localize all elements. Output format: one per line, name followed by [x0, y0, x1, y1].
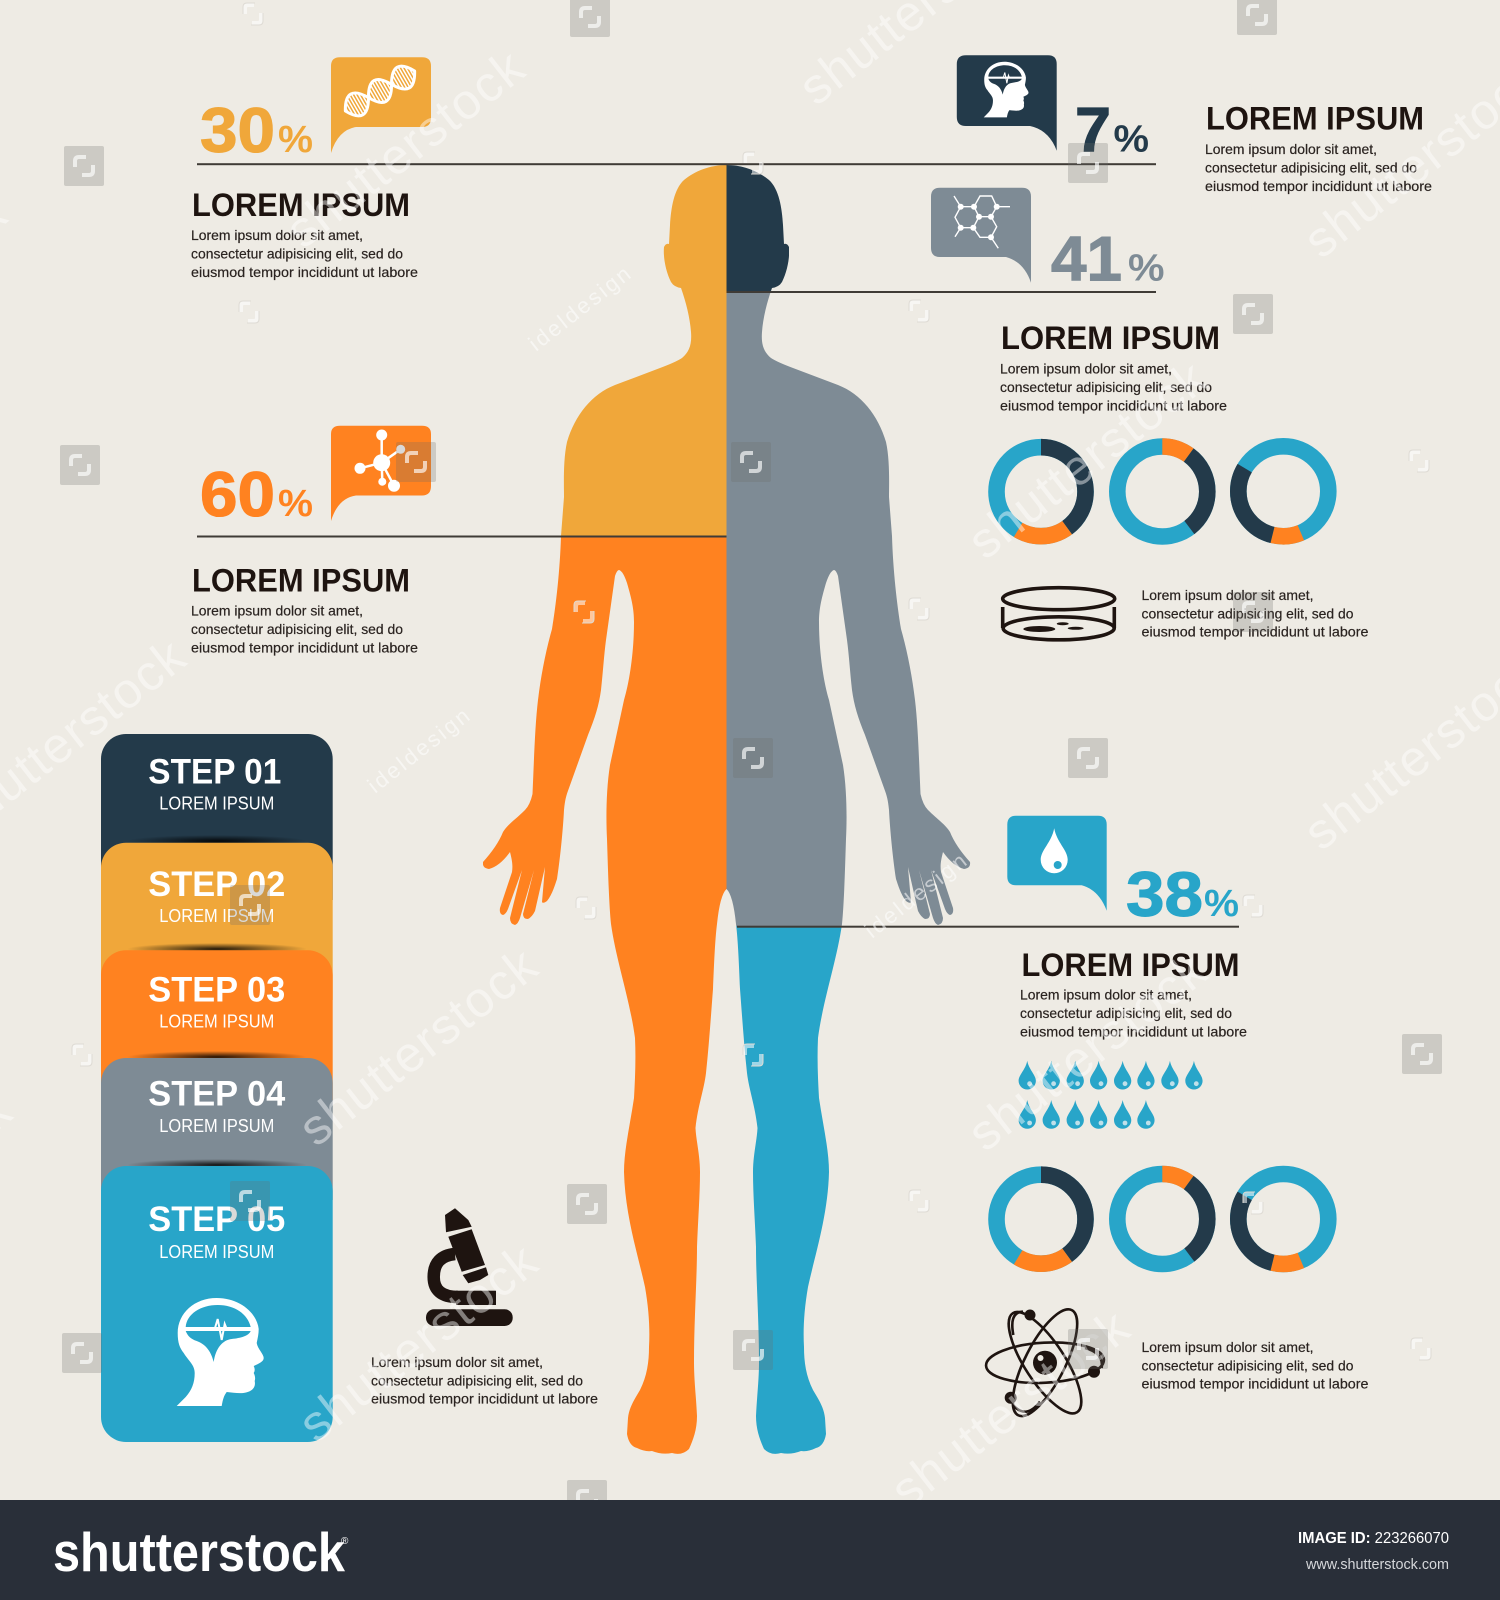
text block: petri dish caption — [1142, 587, 1369, 640]
body part: upper left torso and head (amber) — [561, 165, 726, 536]
text block: upper right: consectetur adipisicing elit, sed do — [1000, 379, 1212, 395]
panel: 41% callout — [931, 188, 1164, 295]
footer registered mark: ® — [341, 1536, 349, 1547]
stock watermark overlay: shutterstock — [288, 1232, 548, 1453]
stat: 30% — [200, 96, 313, 166]
text block: top left: eiusmod tempor incididunt ut labore — [191, 264, 418, 280]
text block: middle left: Lorem ipsum dolor sit amet, — [191, 602, 363, 618]
icon: microscope — [426, 1208, 513, 1326]
text block: lower right — [1020, 947, 1247, 1040]
leader lines — [197, 163, 1239, 928]
stat: 41%: 41 — [1051, 225, 1122, 295]
donut 2 — [1117, 1174, 1207, 1264]
stat: 7%: 7 — [1075, 96, 1111, 166]
stock watermark overlay: shutterstock — [288, 936, 548, 1157]
stock watermark overlay: shutterstock — [275, 38, 535, 259]
stat: 7% — [1075, 96, 1149, 166]
text block: petri dish caption: eiusmod tempor incididunt ut labore — [1142, 624, 1369, 640]
stat: 41%: % — [1128, 248, 1164, 290]
donut 1 — [996, 447, 1086, 536]
icon: head with brain pulse — [177, 1298, 264, 1406]
step 01 card: STEP 01 — [148, 753, 281, 792]
stat: 60%: 60 — [200, 460, 275, 530]
text block: top left: LOREM IPSUM — [192, 187, 410, 223]
donut 3 — [1238, 1174, 1328, 1264]
body part: right torso and arm (gray) — [726, 292, 970, 926]
stat: 30%: 30 — [200, 96, 275, 166]
text block: top left: Lorem ipsum dolor sit amet, — [191, 227, 363, 243]
step 02 card — [101, 843, 333, 1000]
donut charts: lower row — [996, 1174, 1328, 1264]
body part: right head (navy) — [726, 165, 789, 292]
panel: 60% callout — [200, 426, 431, 530]
text block: middle left: LOREM IPSUM — [192, 562, 410, 598]
text block: atom caption — [1142, 1339, 1369, 1392]
text block: top right: Lorem ipsum dolor sit amet, — [1205, 141, 1377, 157]
human body figure — [483, 165, 970, 1454]
step 02 card: LOREM IPSUM — [159, 906, 274, 926]
text block: top right — [1205, 100, 1432, 194]
panel: 38% callout — [1007, 816, 1239, 930]
step 04 card: LOREM IPSUM — [159, 1116, 274, 1136]
panel: 30% callout — [200, 57, 431, 166]
stat: 41% — [1051, 225, 1164, 295]
text block: microscope caption: consectetur adipisicing elit, sed do — [371, 1373, 583, 1389]
icon: brain head speech bubble — [957, 55, 1057, 151]
donut 3 — [1238, 446, 1328, 536]
step 03 card: STEP 03 — [148, 971, 285, 1010]
text block: microscope caption: eiusmod tempor incididunt ut labore — [371, 1391, 598, 1407]
icon: chemical structure speech bubble — [931, 188, 1031, 283]
step 05 card — [101, 1166, 333, 1442]
footer bar — [0, 1500, 1500, 1600]
text block: microscope caption: Lorem ipsum dolor sit amet, — [371, 1354, 543, 1370]
stock watermark overlay: ideldesign — [363, 703, 474, 798]
stat: 38%: % — [1204, 883, 1239, 925]
text block: atom caption: eiusmod tempor incididunt ut labore — [1142, 1376, 1369, 1392]
stock watermark overlay: shutterstock — [880, 1298, 1140, 1519]
stat: 38% — [1126, 860, 1239, 930]
panel: step stack — [101, 734, 333, 1442]
stat: 38%: 38 — [1126, 860, 1203, 930]
body part: lower left body (orange) — [483, 536, 726, 1454]
text block: upper right: LOREM IPSUM — [1001, 320, 1220, 356]
stock watermark overlay: ideldesign — [860, 848, 971, 943]
step 03 card — [101, 950, 333, 1100]
text block: top right: consectetur adipisicing elit, sed do — [1205, 160, 1417, 176]
panel: 7% callout — [957, 55, 1149, 166]
step 01 card: LOREM IPSUM — [159, 794, 274, 814]
footer image id: IMAGE ID: 223266070 — [1298, 1530, 1449, 1547]
icon: molecule speech bubble — [331, 426, 431, 521]
stat: 60%: % — [278, 483, 313, 525]
icon: petri dish — [1003, 588, 1115, 640]
stock watermark overlay: shutterstock — [957, 349, 1217, 570]
step 04 card: STEP 04 — [148, 1075, 286, 1114]
text block: middle left: eiusmod tempor incididunt ut labore — [191, 640, 418, 656]
text block: upper right: eiusmod tempor incididunt ut labore — [1000, 398, 1227, 414]
step 04 card — [101, 1058, 333, 1200]
donut charts: upper row — [996, 446, 1328, 536]
footer url: www.shutterstock.com — [1305, 1556, 1449, 1573]
text block: top right: eiusmod tempor incididunt ut labore — [1205, 178, 1432, 194]
text block: petri dish caption: Lorem ipsum dolor sit amet, — [1142, 587, 1314, 603]
footer logo: shutterstock — [53, 1521, 345, 1583]
text block: microscope caption — [371, 1354, 598, 1407]
step 05 card: LOREM IPSUM — [159, 1242, 274, 1262]
text block: lower right: Lorem ipsum dolor sit amet, — [1020, 986, 1192, 1002]
text block: lower right: eiusmod tempor incididunt ut labore — [1020, 1024, 1247, 1040]
step 02 card: STEP 02 — [148, 865, 285, 904]
text block: middle left — [191, 562, 418, 656]
icon row: water drops — [1019, 1061, 1203, 1129]
text block: upper right — [1000, 320, 1227, 414]
text block: upper right: Lorem ipsum dolor sit amet, — [1000, 360, 1172, 376]
stock watermark overlay: ideldesign — [524, 261, 635, 356]
step 01 card — [101, 734, 333, 900]
body part: right leg (blue) — [726, 926, 842, 1454]
step 03 card: LOREM IPSUM — [159, 1012, 274, 1032]
icon: atom — [985, 1301, 1105, 1424]
text block: lower right: LOREM IPSUM — [1022, 947, 1240, 983]
text block: petri dish caption: consectetur adipisicing elit, sed do — [1142, 605, 1354, 621]
text block: lower right: consectetur adipisicing elit, sed do — [1020, 1005, 1232, 1021]
text block: top left — [191, 187, 418, 280]
stock watermark overlay: shutterstock — [957, 941, 1217, 1162]
text block: atom caption: Lorem ipsum dolor sit amet, — [1142, 1339, 1314, 1355]
stat: 30%: % — [278, 119, 313, 161]
stat: 60% — [200, 460, 313, 530]
stat: 7%: % — [1114, 119, 1149, 161]
step 05 card: STEP 05 — [148, 1200, 285, 1239]
text block: atom caption: consectetur adipisicing elit, sed do — [1142, 1357, 1354, 1373]
icon: DNA speech bubble — [331, 57, 431, 153]
icon: water drop speech bubble — [1007, 816, 1107, 911]
text block: middle left: consectetur adipisicing elit, sed do — [191, 621, 403, 637]
donut 1 — [996, 1175, 1086, 1264]
text block: top right: LOREM IPSUM — [1206, 100, 1424, 136]
text block: top left: consectetur adipisicing elit, sed do — [191, 246, 403, 262]
donut 2 — [1117, 446, 1207, 536]
